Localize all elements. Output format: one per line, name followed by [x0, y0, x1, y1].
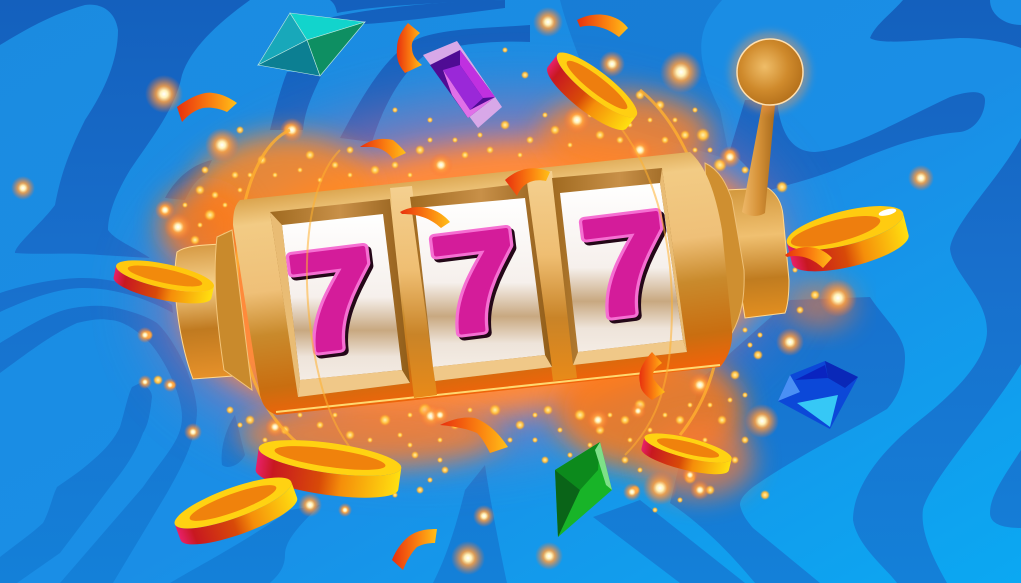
coin: bottom right [639, 427, 734, 480]
gem: purple [423, 41, 502, 128]
seven 1: 7 [281, 218, 385, 383]
seven 3: 7 [574, 183, 678, 348]
coin: top [540, 44, 644, 139]
drum body [233, 152, 732, 415]
left reel [270, 199, 410, 397]
seven 3 outline: 7 [574, 183, 678, 348]
ribbons [177, 14, 832, 570]
gem: teal [258, 13, 365, 76]
coin: right big [783, 197, 913, 280]
orange energy rings back [237, 90, 720, 445]
drum lower highlight [276, 365, 720, 412]
middle reel [410, 183, 552, 381]
seven 2: 7 [424, 200, 528, 365]
seven 1 shadow: 7 [284, 221, 388, 386]
right collar [705, 163, 744, 340]
seven 2 outline: 7 [424, 200, 528, 365]
sparkles: small [143, 47, 820, 514]
glow behind machine [142, 73, 855, 498]
seven 1 outline: 7 [281, 218, 385, 383]
lever [730, 32, 810, 216]
coin: bottom left [170, 468, 302, 554]
slot machine [175, 32, 810, 415]
left collar [215, 230, 252, 390]
divider strips [390, 186, 437, 398]
coin: bottom big [254, 433, 403, 505]
gem: blue [778, 361, 858, 429]
orange energy rings front [307, 105, 672, 465]
gem: green [555, 442, 612, 537]
right end cap [725, 188, 789, 318]
right reel [552, 168, 687, 365]
left end cap [175, 244, 233, 379]
seven 2 shadow: 7 [427, 203, 531, 368]
seven 3 shadow: 7 [577, 186, 681, 351]
coin: left [111, 254, 216, 310]
